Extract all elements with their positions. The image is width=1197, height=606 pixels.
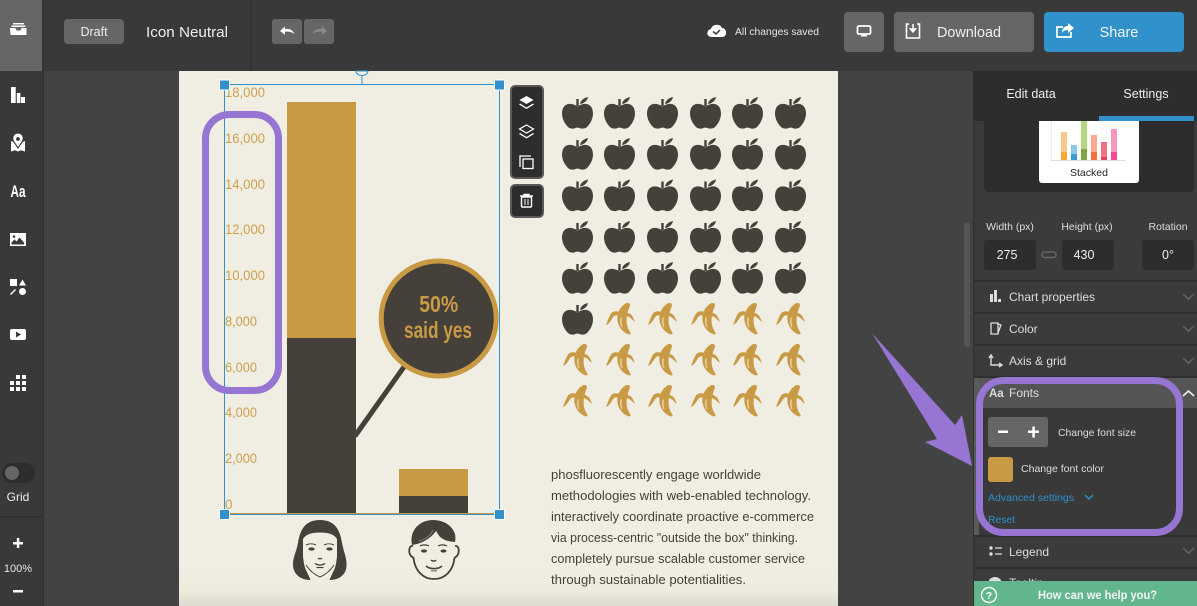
axis labels [225,85,265,512]
size fields: Width (px) [986,221,1034,233]
arrow: points to font settings [872,333,972,466]
icon: man face [409,520,459,579]
font size stepper: Change font size [1058,427,1136,439]
draft badge: Draft [80,25,108,39]
icon: tray [10,23,26,35]
size fields [984,221,1194,270]
infographic page [179,71,838,606]
size fields: 275 [997,248,1017,262]
grid toggle: Grid [7,490,29,504]
axis labels: 12,000 [225,222,265,237]
section: tooltip (cut off): Tooltip [1009,576,1044,590]
canvas background [44,71,973,606]
body text block: phosfluorescently engage worldwide [551,467,761,482]
axis labels: 10,000 [225,268,265,283]
share button: Share [1100,25,1138,41]
size fields: 430 [1074,248,1094,262]
grid toggle [2,463,35,504]
panel tabs [973,71,1197,121]
highlight: axis labels [206,114,278,390]
icon: shapes [10,279,26,295]
size fields: Rotation [1148,221,1188,233]
font colour swatch [988,457,1105,482]
preview button [844,12,884,52]
help bar: ? [986,590,992,602]
delete tool [511,185,543,217]
icon: woman face [293,520,347,581]
layer and copy tools [511,86,543,178]
icon: image [10,233,26,246]
section: axis and grid: Axis & grid [1009,354,1066,368]
callout: 50% said yes: said yes [404,317,472,343]
chart type thumbnail [984,121,1194,192]
save status [707,25,819,38]
body text block: interactively coordinate proactive e-commerce [551,509,814,524]
body text block: methodologies with web-enabled technology. [551,488,811,503]
axis labels: 0 [225,497,233,512]
share button [1044,12,1184,52]
section: axis and grid [989,354,1194,368]
section: color [991,322,1194,336]
left sidebar [0,0,44,606]
icon: grid [10,375,26,391]
help bar [974,581,1197,606]
axis labels: 4,000 [225,405,257,420]
size fields: Height (px) [1061,221,1113,233]
panel tabs: Edit data [1006,87,1056,101]
zoom controls [4,538,32,592]
download button: Download [937,25,1001,41]
section: fonts [974,378,1197,535]
advanced settings link: Advanced settings [988,492,1074,504]
bar: women [287,102,356,513]
font size stepper [988,417,1136,447]
section: tooltip (cut off) [988,576,1044,591]
right settings panel [973,71,1197,606]
draft badge [64,19,124,44]
bar: men [399,469,468,513]
section: color: Color [1009,322,1038,336]
highlight: font settings [980,380,1180,532]
body text block [551,467,814,587]
zoom controls: 100% [4,563,32,575]
icon: text: Aa [10,183,26,201]
floating element toolbar [511,86,543,217]
panel tabs: Settings [1123,87,1169,101]
download button [894,12,1034,52]
section: fonts: Fonts [1009,386,1039,400]
save status: All changes saved [735,26,819,38]
icon: video [10,329,26,340]
stacked bar chart [224,85,499,514]
axis labels: 2,000 [225,451,257,466]
section: fonts: Aa [989,388,1004,400]
size fields: 0° [1162,248,1174,262]
axis labels: 16,000 [225,131,265,146]
top toolbar [0,0,1197,71]
axis labels: 14,000 [225,177,265,192]
axis labels: 18,000 [225,85,265,100]
axis labels: 8,000 [225,314,257,329]
section: chart properties [990,290,1194,304]
body text block: completely pursue scalable customer service [551,551,805,566]
body text block: through sustainable potentialities. [551,572,746,587]
canvas scrollbar [964,222,970,347]
section: chart properties: Chart properties [1009,290,1095,304]
icon: map pin [11,131,25,152]
callout: 50% said yes: 50% [419,291,458,317]
section: legend [989,545,1194,559]
help bar: How can we help you? [1038,590,1157,602]
selection frame [220,71,504,520]
section: legend: Legend [1009,545,1049,559]
undo button [272,19,302,44]
chart type thumbnail: Stacked [1070,167,1108,179]
reset link: Reset [988,514,1015,526]
icon: bar chart [11,87,25,103]
axis labels: 6,000 [225,360,257,375]
font colour swatch: Change font color [1021,463,1105,475]
document title: Icon Neutral [146,25,228,41]
body text block: via process-centric "outside the box" thinking. [551,530,798,545]
redo button [304,19,334,44]
pictogram: apples and bananas [562,97,806,416]
callout: 50% said yes [355,261,496,436]
